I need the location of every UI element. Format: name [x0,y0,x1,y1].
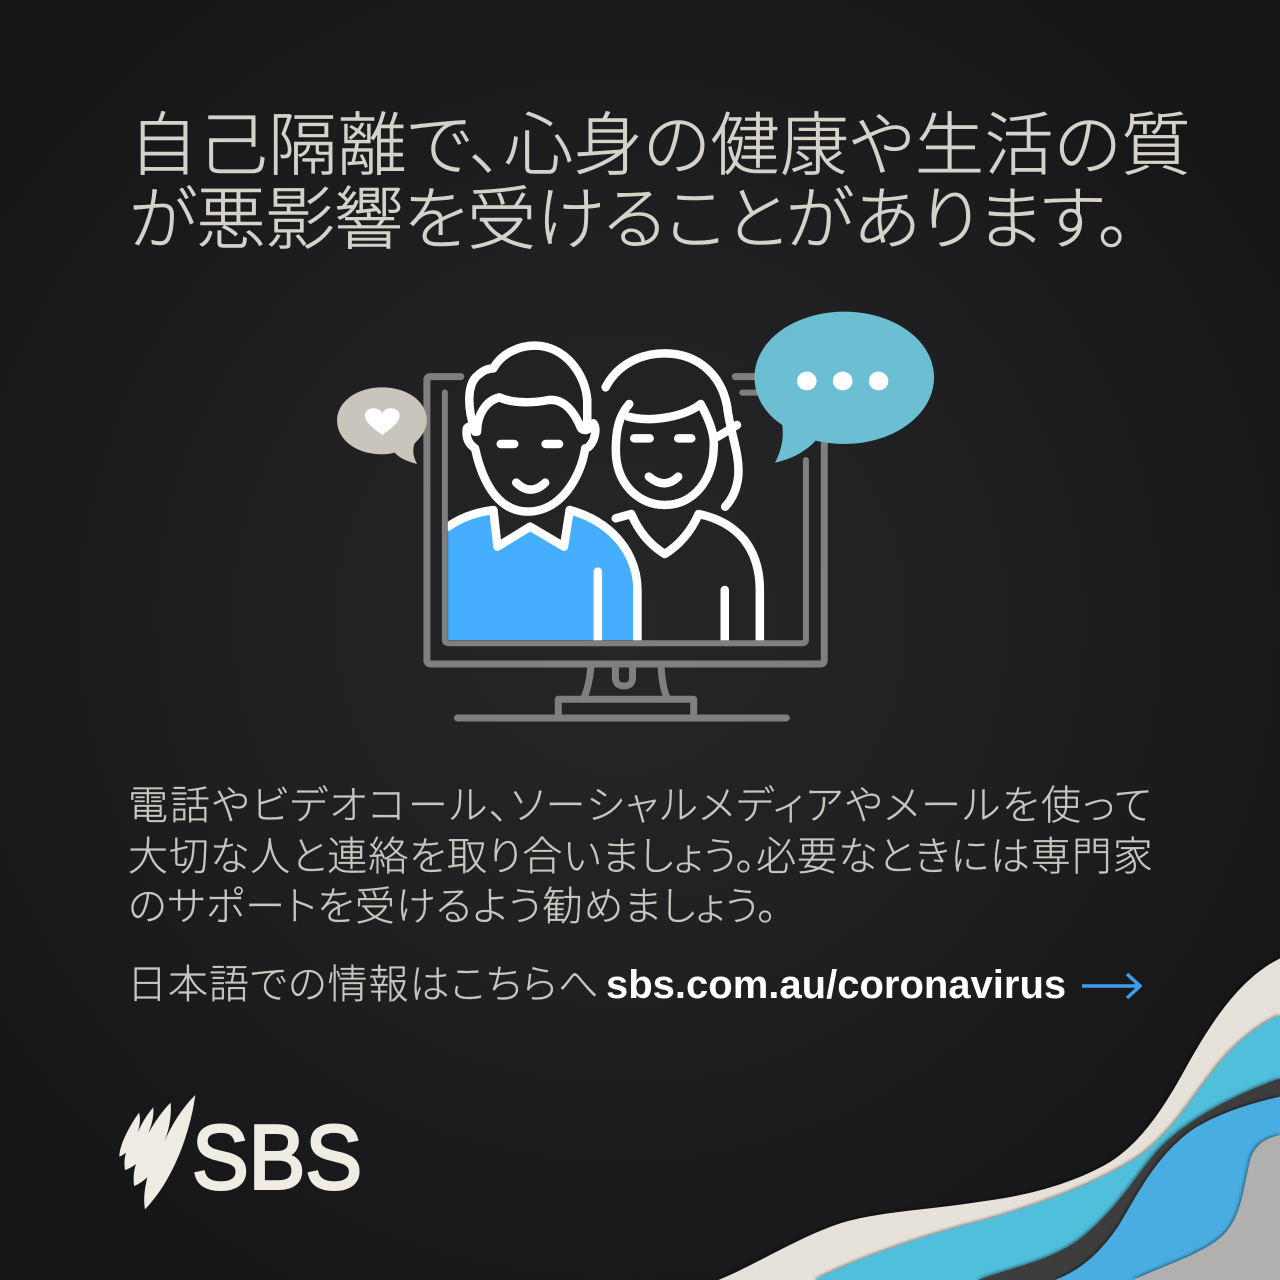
body text: 電話やビデオコール、ソーシャルメディアやメールを使って [128,784,1154,828]
body text: 大切な人と連絡を取り合いましょう。必要なときには専門家 [128,835,1154,879]
link line: sbs.com.au/coronavirus [606,963,1066,1007]
SBS logo [119,1095,362,1210]
arrow [1082,972,1142,1000]
body text [128,784,1154,929]
speech bubble: dots [755,312,934,463]
body text: のサポートを受けるよう勧めましょう。 [128,885,778,929]
link line: 日本語での情報はこちらへ [127,963,600,1007]
person: man in blue jumper [448,346,637,640]
title: 自己隔離で、心身の健康や生活の質 [129,107,1191,184]
title: が悪影響を受けることがあります。 [129,181,1132,258]
title [129,107,1191,258]
monitor screen edge [445,392,806,643]
SBS logo: SBS [192,1107,362,1209]
monitor [427,377,824,718]
link line [127,963,1142,1007]
speech bubble: heart [337,387,427,464]
person: woman [606,353,760,640]
